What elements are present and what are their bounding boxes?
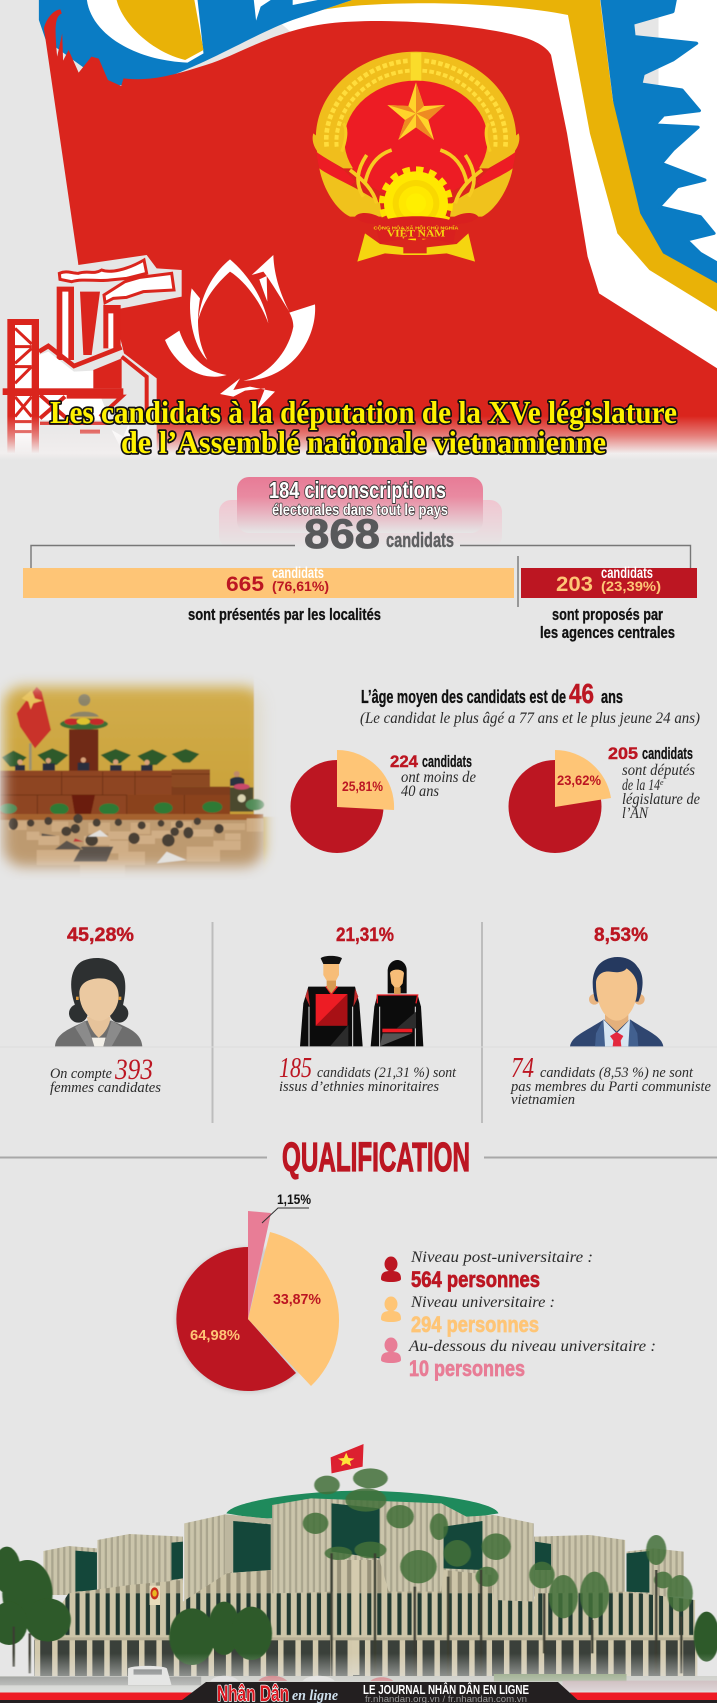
constituencies heading: 184 circonscriptions [269,477,446,503]
text: deputies: législature de [622,791,700,808]
icon: person pink [381,1338,401,1363]
legend item: below graduate [408,1338,656,1381]
cars and street [0,1666,717,1693]
text: deputies: 205 [608,744,638,763]
green dome [226,1491,498,1518]
203 label: candidats [601,565,653,582]
constituencies sub-heading: électorales dans tout le pays [272,502,448,519]
dark glass windows [75,1503,649,1593]
legend: qualification [381,1249,656,1381]
sector: below graduate 1.15% [248,1211,271,1319]
pie: under 40 [290,750,394,853]
665 label: (76,61%) [272,578,329,594]
ground floor columns [34,1640,697,1676]
text: deputies: de la 14 [622,777,660,794]
sector: graduate 33.87% [248,1232,339,1386]
icon: person red [381,1256,401,1282]
age heading: 46 [569,678,594,709]
label 33,87%: 33,87% [273,1291,321,1308]
icon: person orange [381,1296,401,1322]
pie shadow [175,1247,321,1393]
icon: lotus [112,255,315,447]
text: non-party members: pas membres du Parti communiste [510,1079,711,1095]
flag [331,1444,364,1473]
panel: total candidates [23,477,697,642]
icon: ethnic minority couple [300,956,423,1046]
legend item: post-graduate: Niveau post-universitaire : [410,1249,593,1266]
text: minorities [279,1053,457,1095]
trees [0,1468,717,1677]
dark trapezoid [178,1682,581,1703]
bar: central agencies [521,568,697,598]
agencies caption [540,605,675,642]
665 label: 665 [226,573,264,596]
label 1,15%: 1,15% [277,1191,311,1207]
text: women [50,1053,161,1096]
panel: average age [290,678,700,853]
minorities percentage: 21,31% [336,925,394,946]
icon: national emblem of Vietnam: VIỆT NAM [387,226,445,239]
pie chart: qualification [175,1191,339,1393]
title [50,394,677,460]
icon: woman [55,958,142,1046]
wall emblem [150,1586,160,1605]
text: women: On compte [50,1066,112,1082]
women percentage: 45,28% [67,925,134,946]
column divider [481,922,483,1123]
665 label [226,565,329,596]
photo: national assembly session [0,670,280,880]
newspaper name: LE JOURNAL NHÂN DÂN EN LIGNE [363,1682,529,1697]
text: women: femmes candidates [50,1080,161,1096]
bracket left [31,546,295,570]
bar divider [517,556,519,607]
text: deputies: l’AN [622,805,649,822]
age heading [361,678,623,709]
icon: man in suit [570,957,663,1046]
665 label: candidats [272,565,324,582]
red band right [570,1692,717,1700]
age heading: L’âge moyen des candidats est de [361,687,566,707]
legend item: graduate: Niveau universitaire : [410,1294,555,1311]
legend item: below graduate: Au-dessous du niveau universitaire : [408,1338,656,1355]
text: non-party members: candidats (8,53 %) ne sont [540,1065,694,1081]
sector: post-graduate 64.98% [176,1247,296,1391]
pie: deputies of 14th legislature [508,750,611,853]
title: de l’Assemblé nationale vietnamienne [121,424,606,460]
bar: localities [23,568,514,598]
pink back box [219,500,502,548]
text: deputies: e [660,778,664,787]
pie: under 40: 25,81% [342,778,383,794]
text: deputies [608,744,700,822]
text: women: 393 [114,1053,153,1086]
icon: national emblem of Vietnam: CỘNG HÒA XÃ HỘI CHỦ NGHĨA [373,223,459,231]
photo: national assembly building [0,1444,717,1693]
panel: candidate profile columns [0,922,717,1123]
red band left [0,1692,192,1700]
legend item: post-graduate [410,1249,593,1292]
text: minorities: candidats (21,31 %) sont [317,1065,457,1081]
text: under 40: ont moins de [401,769,476,786]
candidats label: candidats [386,530,454,552]
icon: factory [0,255,182,460]
text: non-party members: vietnamien [511,1092,575,1108]
banner bottom fade [0,416,717,460]
age subheading: (Le candidat le plus âgé a 77 ans et le plus jeune 24 ans) [360,710,700,727]
legend item: post-graduate: 564 personnes [411,1267,540,1292]
agencies caption: les agences centrales [540,623,675,642]
text: under 40: candidats [422,752,472,771]
pink front box [237,477,483,533]
legend item: graduate [410,1294,555,1337]
building blocks [43,1498,684,1637]
legend item: below graduate: 10 personnes [409,1356,525,1381]
agencies caption: sont proposés par [552,605,663,624]
banner: red flag artwork [39,0,717,458]
text: minorities: 185 [279,1053,312,1084]
text: under 40: 40 ans [401,783,439,800]
text: deputies: sont députés [622,762,695,779]
bottom fade [0,1653,717,1693]
text: non-party members [510,1053,711,1108]
localities caption: sont présentés par les localités [188,605,381,624]
column divider [212,922,214,1123]
footer: Nhan Dan masthead [0,1681,717,1703]
text: under 40 [390,752,476,800]
age heading: ans [601,687,623,707]
text: non-party members: 74 [511,1053,534,1084]
colonnade tier [37,1560,695,1642]
text: under 40: 224 [390,752,419,771]
dark bottom strip [0,1700,717,1703]
868 total: 868 [304,510,380,557]
203 label: 203 [556,573,593,596]
203 label [556,565,661,596]
bracket right [460,546,690,570]
icon: national emblem of Vietnam [313,52,519,262]
baseline [0,1046,717,1048]
legend item: graduate: 294 personnes [411,1312,539,1337]
pie: deputies of 14th legislature: 23,62% [557,772,602,788]
203 label: (23,39%) [601,578,661,594]
text: minorities: issus d’ethnies minoritaires [279,1079,439,1095]
non-party percentage: 8,53% [594,925,648,946]
heading: qualification: QUALIFICATION [282,1134,470,1180]
leader line [262,1208,309,1223]
label 64,98%: 64,98% [190,1327,240,1344]
